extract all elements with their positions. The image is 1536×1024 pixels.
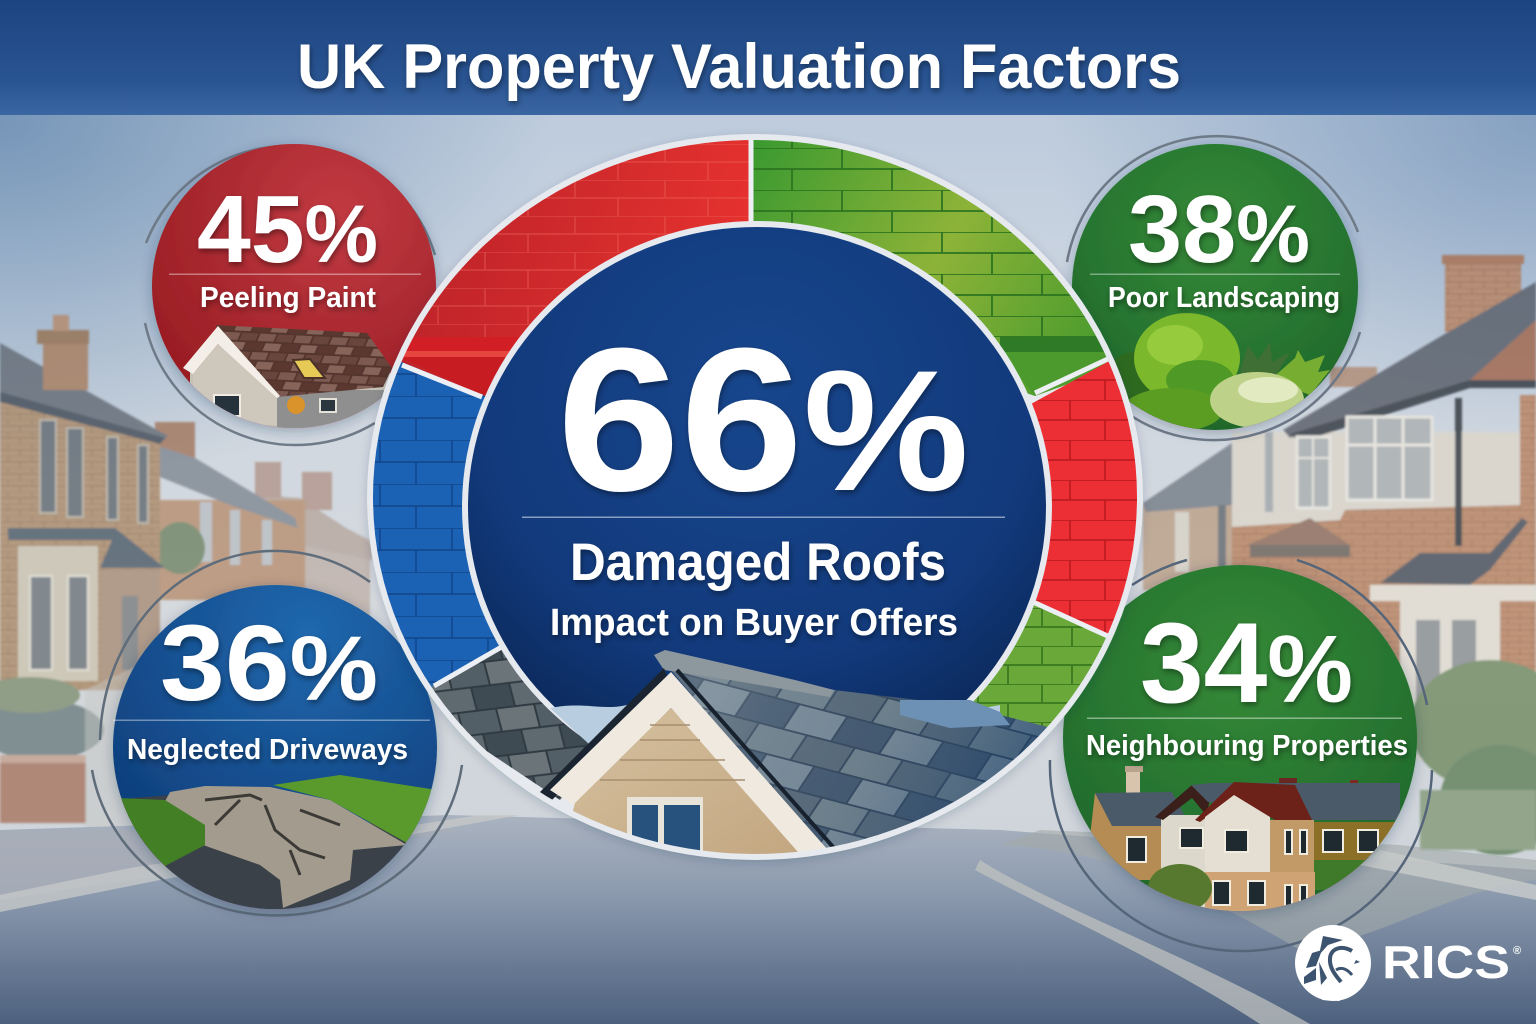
panel: 38% poor landscaping [1067, 136, 1360, 440]
arcs around panel [1067, 136, 1360, 440]
central subheading: Impact on Buyer Offers [550, 602, 958, 644]
central roof illustration [536, 650, 1060, 860]
arcs around panel [145, 146, 435, 445]
ring segment: blue left [373, 362, 499, 688]
38% figure: 38% [1128, 176, 1310, 283]
divider [113, 720, 430, 721]
panel: 45% peeling paint [145, 144, 436, 445]
garden illustration [1107, 313, 1330, 432]
divider [1087, 718, 1402, 719]
left hedge and wall [0, 660, 150, 830]
blue disc [113, 585, 437, 909]
red disc [152, 144, 436, 428]
terraced houses illustration [1085, 766, 1404, 915]
central divider [522, 516, 1005, 518]
45% figure: 45% [197, 176, 378, 283]
ring segment: green lower right [974, 605, 1106, 727]
central ring chart [360, 130, 1150, 860]
road [0, 815, 1536, 1024]
central navy disc [465, 224, 1049, 790]
RICS wordmark: RICS [1382, 936, 1510, 988]
green disc [1063, 565, 1417, 911]
divider [169, 274, 421, 275]
right background house [1143, 367, 1377, 590]
clouds behind roof [550, 700, 1000, 745]
central figure: 66%: 66% [557, 306, 969, 534]
registered mark: ® [1513, 945, 1521, 957]
cracked driveway illustration [121, 775, 432, 909]
right hedge [1410, 660, 1536, 855]
36% figure: 36% [160, 602, 378, 723]
green disc [1072, 144, 1358, 430]
ring segment: green top right [754, 140, 1108, 396]
left near house [0, 0, 168, 690]
title band [0, 0, 1536, 115]
label: Peeling Paint [200, 282, 376, 314]
peeling paint house illustration [183, 325, 392, 428]
arcs around panel [92, 551, 462, 915]
left far houses [240, 462, 372, 640]
ring segment: red top left [402, 140, 748, 396]
right near house [1232, 255, 1536, 760]
panel: 34% neighbouring properties [1050, 560, 1432, 951]
ring segment: red right [1032, 362, 1137, 634]
divider [1090, 274, 1340, 275]
label: Neglected Driveways [127, 734, 408, 766]
central heading: Damaged Roofs [570, 533, 946, 592]
label: Poor Landscaping [1108, 282, 1340, 314]
panel: 36% neglected driveways [92, 551, 462, 920]
title text: UK Property Valuation Factors [297, 32, 1181, 102]
ring segment separators [402, 137, 1112, 686]
ring segment: slate roof lower left [432, 650, 588, 800]
RICS logo [1295, 925, 1521, 1001]
ring outline [370, 137, 1140, 857]
left middle house [155, 422, 305, 600]
arcs around panel [1050, 560, 1432, 951]
34% figure: 34% [1140, 600, 1353, 727]
lion emblem [1295, 925, 1371, 1001]
label: Neighbouring Properties [1086, 730, 1408, 762]
